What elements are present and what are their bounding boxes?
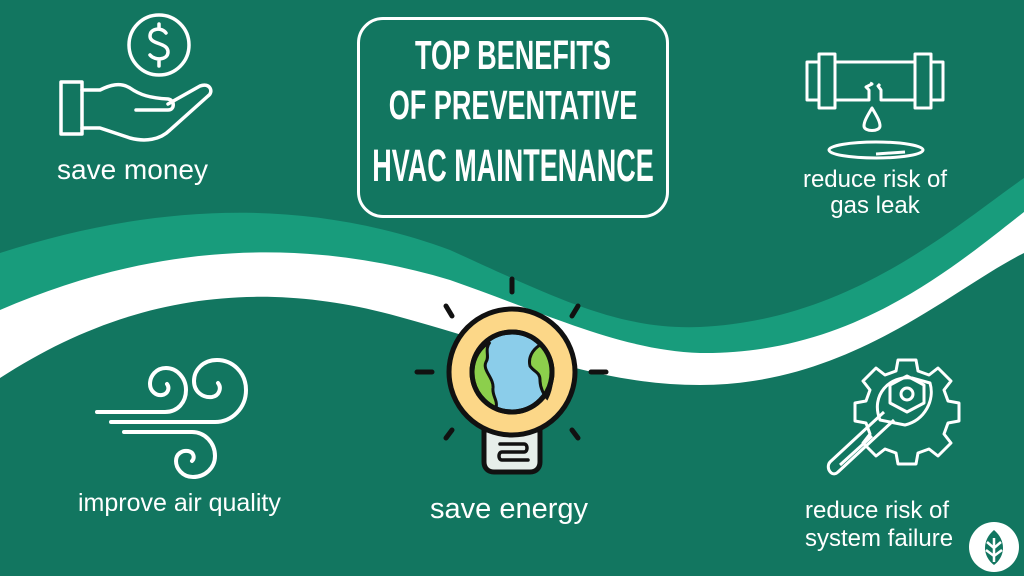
label: reduce risk of system failure: system failure bbox=[805, 525, 953, 552]
title text: OF PREVENTATIVE bbox=[389, 82, 637, 128]
title box bbox=[357, 17, 669, 218]
title text: HVAC MAINTENANCE bbox=[372, 140, 654, 191]
label: improve air quality: improve air quality bbox=[78, 489, 281, 517]
title text: TOP BENEFITS bbox=[415, 32, 611, 78]
label: reduce risk of system failure bbox=[805, 497, 953, 552]
label: reduce risk of gas leak: reduce risk of bbox=[803, 166, 947, 193]
label: save money: save money bbox=[57, 154, 208, 185]
label: reduce risk of system failure: reduce risk of bbox=[805, 497, 949, 524]
label: reduce risk of gas leak bbox=[803, 166, 948, 219]
label: reduce risk of gas leak: gas leak bbox=[830, 192, 920, 219]
label: save energy: save energy bbox=[430, 493, 588, 525]
title text bbox=[372, 32, 654, 191]
